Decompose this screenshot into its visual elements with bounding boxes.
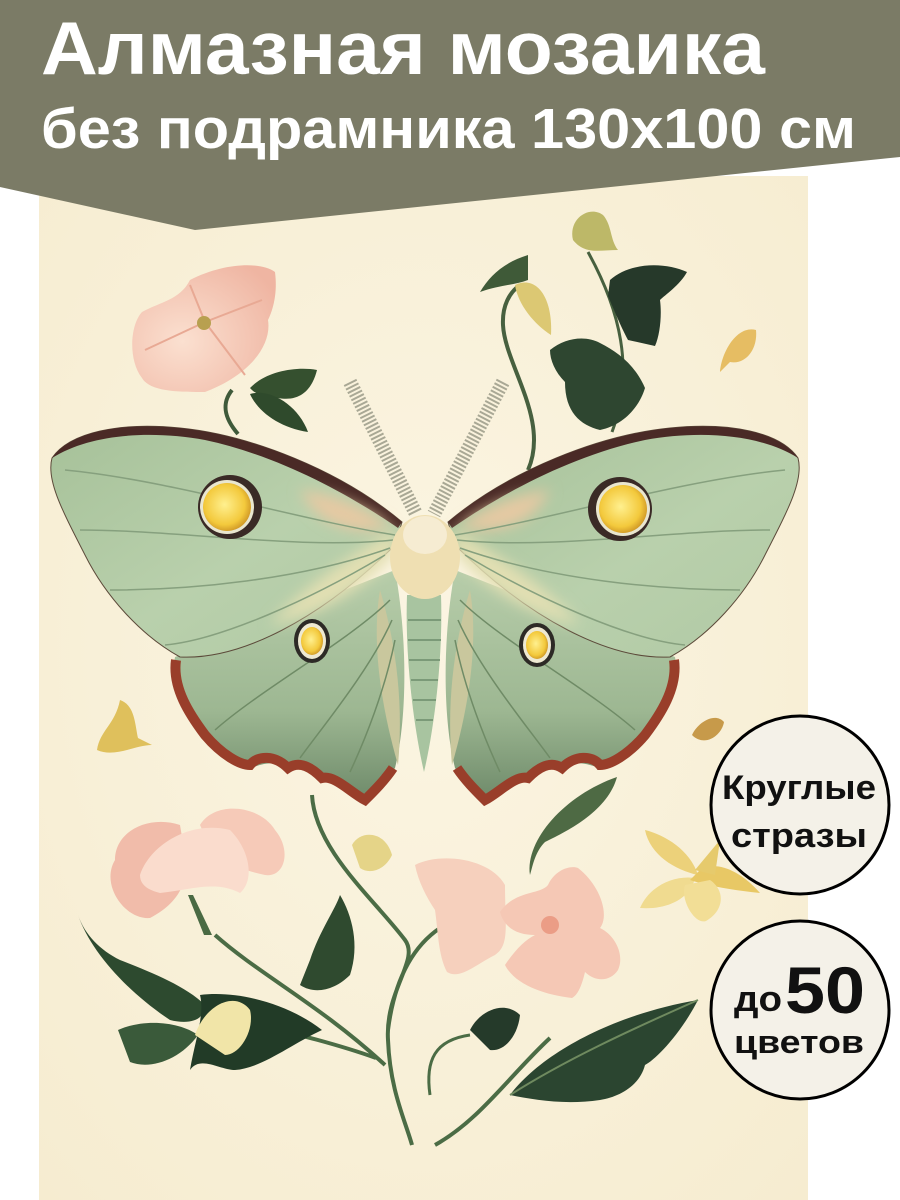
body fringe — [450, 590, 473, 765]
thorax — [390, 515, 460, 599]
header banner — [0, 0, 900, 230]
badge: up to 50 colours: до — [734, 978, 782, 1019]
forewing eyespot — [198, 475, 262, 539]
abdomen — [407, 595, 441, 772]
right wings — [446, 426, 799, 805]
forewing veins — [65, 470, 395, 645]
bottom botanical stems — [215, 795, 550, 1145]
hindwing veins — [455, 600, 635, 772]
forewing veins — [455, 470, 785, 645]
top left pink flower — [132, 265, 317, 434]
badge: up to 50 colours: цветов — [734, 1024, 864, 1060]
title line 2: без подрамника 130х100 см — [41, 97, 856, 161]
forewing eyespot — [588, 477, 652, 541]
forewing dark edge — [52, 426, 402, 528]
pink flush — [300, 490, 392, 531]
small yellow petal top right — [720, 329, 756, 372]
small yellow flower left — [97, 700, 152, 753]
hindwing — [174, 570, 404, 805]
hindwing — [446, 570, 676, 805]
left wings — [51, 426, 404, 805]
red margin — [175, 660, 393, 800]
badge: round rhinestones: Круглые — [722, 769, 876, 807]
badge: up to 50 colours: 50 — [785, 953, 865, 1027]
body fringe — [377, 590, 400, 765]
forewing — [51, 426, 402, 657]
badge: round rhinestones: стразы — [731, 817, 867, 855]
hindwing eyespot — [519, 623, 555, 667]
top right stems and leaves — [480, 212, 687, 470]
small seed right — [692, 718, 724, 740]
yellow flower right — [640, 830, 760, 921]
bottom left pink flower — [110, 809, 285, 935]
hindwing veins — [215, 600, 395, 772]
moth body — [350, 382, 503, 772]
bottom right leaves — [429, 1000, 698, 1102]
red margin — [457, 660, 675, 800]
cream hair — [453, 530, 580, 625]
cream hair — [270, 530, 397, 625]
hindwing eyespot — [294, 619, 330, 663]
forewing — [448, 426, 799, 657]
badge: up to 50 colours — [711, 921, 889, 1099]
forewing dark edge — [448, 426, 798, 528]
small bud centre — [352, 835, 392, 871]
title line 1: Алмазная мозаика — [41, 6, 766, 90]
antennae — [350, 382, 416, 514]
badge: round rhinestones — [711, 716, 889, 894]
bottom left leaves — [78, 895, 355, 1070]
cream art panel — [39, 176, 808, 1200]
curled leaf — [530, 777, 617, 875]
pink flush — [458, 490, 550, 531]
bottom centre pink flowers — [415, 858, 620, 998]
